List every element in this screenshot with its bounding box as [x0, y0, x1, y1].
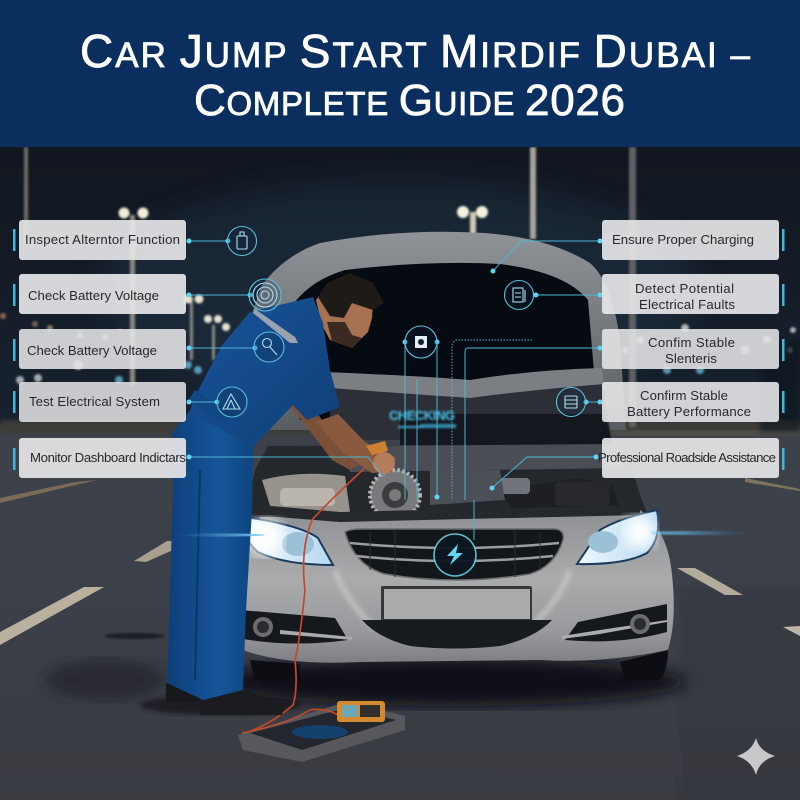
- road markings: [0, 587, 104, 645]
- cable and tray with multimeter: [238, 467, 405, 762]
- hair: [318, 273, 384, 318]
- left panel: Inspect Alternator: Inspect Alterntor Function: [25, 232, 180, 247]
- logo icon: [434, 534, 476, 576]
- hood underside brace: [330, 372, 612, 440]
- title: [80, 25, 751, 125]
- right panel: Professional Roadside Assistance: Professional Roadside Assistance: [598, 450, 776, 465]
- ground shadows: [45, 660, 165, 700]
- left panel: Check Battery Voltage: Check Battery Voltage: [28, 288, 159, 303]
- right panel: Confirm Stable Slenteris: Slenteris: [665, 351, 717, 366]
- front arm and hand: [316, 414, 396, 473]
- icon: magnifier: [254, 332, 284, 362]
- right panel: Professional Roadside Assistance: [598, 438, 779, 478]
- connector lines: [186, 238, 602, 540]
- left panel: Inspect Alternator: [19, 220, 186, 260]
- fog lamps: [238, 604, 667, 644]
- engine bay: [245, 444, 650, 520]
- title: COMPLETE GUIDE 2026: [194, 76, 625, 125]
- back arm: [290, 402, 358, 470]
- right panel: Confirm Stable Battery Performance: Battery Performance: [627, 404, 751, 419]
- car: [236, 232, 674, 680]
- icon: warning triangle: [217, 387, 247, 417]
- header band: [0, 0, 800, 147]
- icon: module chip: [504, 280, 534, 310]
- right panel: Confirm Stable Slenteris: Confim Stable: [648, 335, 735, 350]
- left panel: Check Battery Voltage: [19, 274, 186, 314]
- left panel: Test Electrical System: [19, 382, 186, 422]
- bokeh lights: [0, 313, 796, 384]
- neck and face: [316, 285, 373, 348]
- left panel: Monitor Dashboard: [19, 438, 186, 478]
- hologram display: CHECKING: [389, 408, 455, 423]
- number plate: [381, 586, 532, 624]
- icon: diagnostic box: [405, 326, 437, 358]
- lower grille: [362, 620, 552, 648]
- right panel: Confirm Stable Battery Performance: [602, 382, 779, 422]
- car front body: [236, 510, 674, 663]
- left panel: Test Electrical System: Test Electrical System: [29, 394, 160, 409]
- mechanic: [166, 273, 396, 715]
- right panel: Detect Potential: [602, 274, 779, 314]
- icon: battery tag: [228, 226, 256, 256]
- headlight flares: [175, 531, 750, 537]
- right panel: Ensure Proper Charging: [602, 220, 779, 260]
- right panel: Detect Potential: Detect Potential: [635, 281, 734, 296]
- right panel: Confirm Stable Battery Performance: Confirm Stable: [640, 388, 728, 403]
- open hood: [248, 232, 626, 430]
- trousers: [167, 407, 253, 700]
- grille: [345, 529, 563, 580]
- left panel: Monitor Dashboard: Monitor Dashboard Indictars: [30, 450, 186, 465]
- handheld multimeter: [366, 441, 388, 455]
- left panel: Check Battery Voltage 2: [19, 329, 186, 369]
- title: CAR JUMP START MIRDIF DUBAI –: [80, 25, 751, 77]
- shirt: [190, 297, 340, 447]
- icon: concentric gauge: [249, 279, 281, 311]
- street lamp poles: [24, 147, 636, 427]
- right panel: Ensure Proper Charging: Ensure Proper Charging: [612, 232, 754, 247]
- right panel: Detect Potential: Electrical Faults: [639, 297, 735, 312]
- icon: car battery: [556, 388, 586, 416]
- panel edge glow ticks: [13, 229, 784, 470]
- alternator: [370, 470, 420, 520]
- tyres: [250, 660, 300, 680]
- icon: sparkle watermark: [737, 738, 775, 775]
- headlights: [245, 510, 658, 565]
- connector dots: [186, 238, 602, 500]
- beard: [327, 322, 362, 348]
- right panel: Confirm Stable Slenteris: [602, 329, 779, 369]
- boots: [166, 683, 200, 702]
- left panel: Check Battery Voltage 2: Check Battery Voltage: [27, 343, 157, 358]
